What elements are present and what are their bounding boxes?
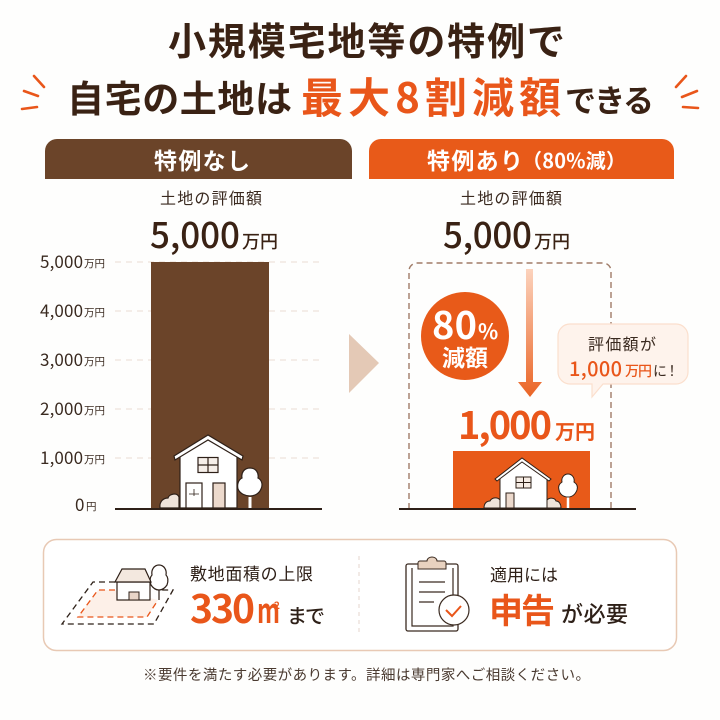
value: 5,000万円: 5,000	[150, 208, 240, 259]
walls	[180, 438, 237, 508]
panel: with special rule	[369, 139, 688, 509]
chart axis labels: 2,000	[40, 395, 83, 420]
title: 自宅の土地は	[67, 69, 292, 123]
chart axis labels: 0	[75, 491, 84, 516]
heading: with special rule	[369, 139, 674, 179]
bar: 5,000万円	[151, 262, 269, 509]
text: filing required: が必要	[561, 597, 628, 629]
text: land area limit	[190, 560, 325, 635]
heading: without special rule	[45, 139, 352, 179]
value: 1,000万円: 1,000	[458, 395, 552, 450]
arrow: reduction	[518, 269, 542, 397]
roof	[174, 435, 243, 460]
value: 1,000万円	[458, 395, 595, 450]
window	[198, 458, 218, 472]
callout: 評価額が	[588, 331, 656, 355]
badge: 80% reduction: %	[478, 316, 498, 346]
callout: 万円	[625, 361, 652, 381]
label: land valuation: 土地の評価額	[460, 185, 562, 209]
value: 5,000万円: 万円	[534, 228, 570, 254]
title: 最大8割減額	[301, 65, 561, 126]
heading: without special rule: 特例なし	[154, 142, 250, 176]
bar: 1,000万円	[453, 451, 590, 509]
chart axis labels: 4,000	[40, 297, 83, 322]
chart axis labels: 5,000	[40, 248, 83, 273]
callout: 1,000	[569, 353, 622, 382]
walls	[500, 461, 547, 508]
dashed original value outline	[409, 263, 611, 509]
tree	[567, 497, 569, 508]
chart axis labels: 円	[86, 499, 96, 514]
text: filing required: 適用には	[490, 561, 558, 586]
title	[67, 11, 654, 126]
chart axis labels: 万円	[84, 403, 105, 418]
chart axis labels: 万円	[84, 354, 105, 369]
icon: left emphasis sparks	[22, 76, 44, 109]
panel: conditions	[44, 540, 676, 650]
roof	[495, 458, 551, 481]
label: land valuation: 土地の評価額	[160, 185, 262, 209]
value: 1,000万円: 万円	[555, 416, 595, 445]
text: land area limit: まで	[287, 600, 325, 629]
chart axis labels: 3,000	[40, 346, 83, 371]
callout: に！	[653, 361, 679, 381]
badge: 80% reduction: 80	[432, 295, 477, 350]
chart axis labels: 万円	[84, 305, 105, 320]
chart axis labels: 万円	[84, 256, 105, 271]
text: land area limit: m	[257, 584, 280, 633]
text: filing required	[489, 561, 628, 633]
title: 小規模宅地等の特例で	[168, 11, 565, 66]
title: できる	[565, 76, 654, 121]
badge: 80% reduction	[421, 292, 509, 380]
door	[506, 493, 514, 508]
text: filing required: 申告	[489, 584, 555, 633]
chart axis labels: 万円	[84, 452, 105, 467]
text: land area limit: 330	[190, 579, 255, 635]
icon: house	[160, 435, 262, 508]
badge: 80% reduction: 減額	[442, 339, 488, 373]
arrow: comparison chevron	[349, 334, 379, 393]
footnote: ※要件を満たす必要があります。詳細は専門家へご相談ください。	[143, 664, 590, 685]
panel: without special rule	[40, 139, 352, 516]
bush	[160, 494, 179, 508]
heading: with special rule: （80%減）	[522, 145, 626, 174]
callout	[558, 324, 688, 397]
icon: right emphasis sparks	[676, 76, 698, 108]
side door	[213, 483, 225, 508]
icon: plot of land with house	[62, 565, 173, 624]
chart axis labels	[40, 248, 105, 516]
icon: clipboard with check	[406, 557, 469, 631]
axis baseline	[115, 508, 322, 510]
axis baseline	[399, 508, 636, 510]
window	[516, 477, 531, 488]
door	[186, 483, 202, 508]
text: land area limit: 2	[274, 597, 280, 612]
value: 5,000万円: 万円	[242, 228, 278, 254]
value: 5,000万円: 5,000	[443, 208, 532, 259]
bushes	[484, 498, 500, 508]
chart axis labels: 1,000	[40, 444, 83, 469]
tree	[248, 497, 252, 508]
icon: house	[484, 458, 577, 508]
heading: with special rule: 特例あり	[427, 142, 523, 176]
text: land area limit: 敷地面積の上限	[190, 560, 313, 585]
